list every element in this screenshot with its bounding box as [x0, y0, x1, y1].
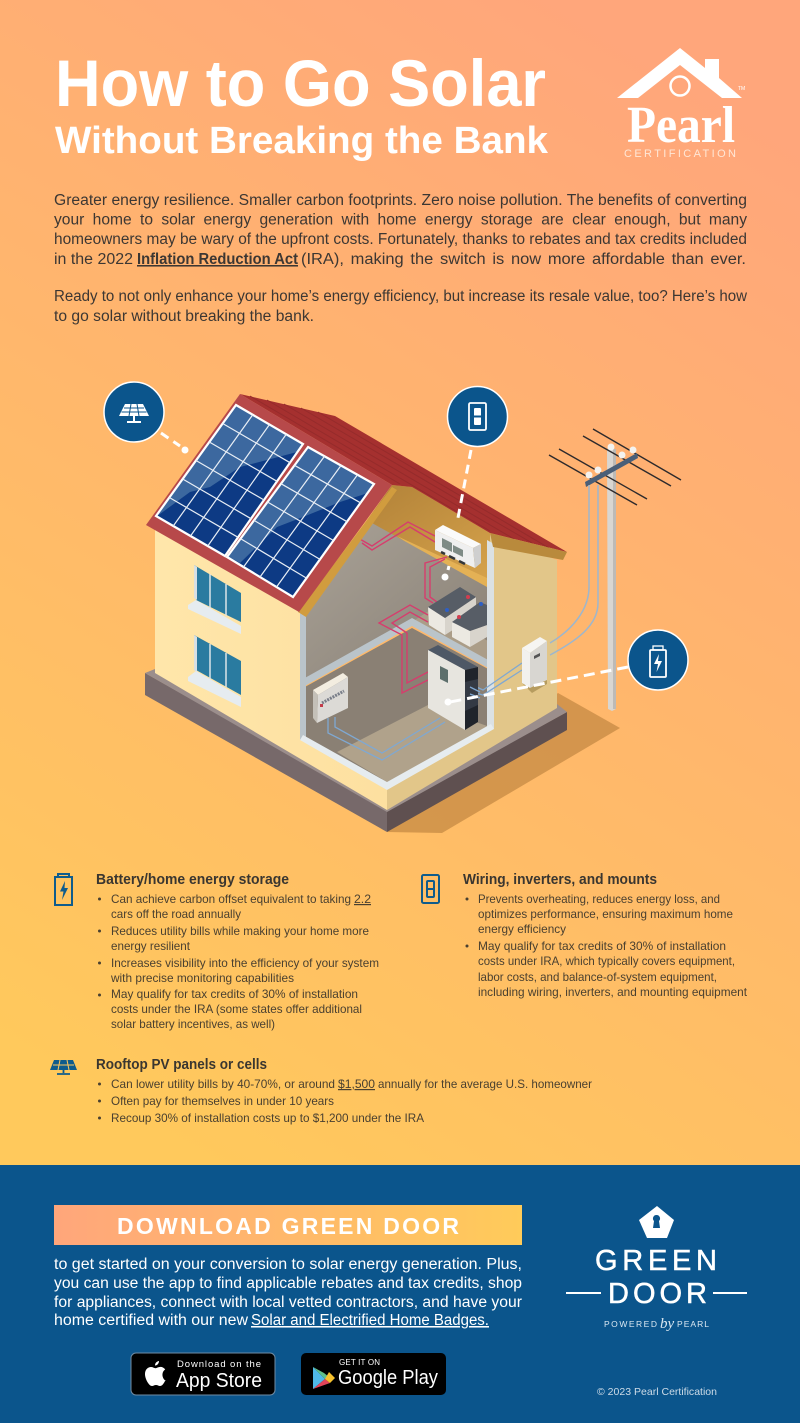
download banner	[54, 1205, 522, 1245]
title: Without Breaking the Bank	[55, 120, 549, 162]
attic beam	[397, 536, 487, 590]
bullets: battery: Increases visibility into the efficiency of your system	[111, 956, 379, 970]
callout line: panels	[161, 433, 188, 454]
batteries	[428, 587, 487, 647]
footer text	[54, 1256, 522, 1329]
footer panel	[0, 1165, 800, 1423]
solar panel left	[156, 405, 303, 556]
title	[55, 46, 549, 162]
logo: Green Door: by	[660, 1316, 674, 1332]
section: rooftop PV	[50, 1057, 592, 1125]
badge: Google Play	[301, 1353, 446, 1395]
bullets: rooftop: Often pay for themselves in under 10 years	[111, 1094, 334, 1108]
intro text: Inflation Reduction Act	[137, 251, 298, 268]
callout line: wiring	[442, 450, 471, 580]
copyright: © 2023 Pearl Certification	[597, 1386, 717, 1398]
badge: App Store	[131, 1353, 275, 1395]
icon: battery	[55, 874, 72, 905]
logo: Green Door: GREEN	[595, 1245, 717, 1277]
bullets: battery: solar battery incentives, as well)	[111, 1017, 275, 1031]
illustration: cutaway solar house	[104, 382, 688, 833]
bullets: wiring: energy efficiency	[478, 922, 566, 936]
icon: panel	[50, 1060, 77, 1074]
wires: magenta DC	[358, 522, 447, 693]
logo: Green Door: DOOR	[608, 1278, 707, 1310]
intro text: your home to solar energy generation with home energy storage are clear enough, but many	[54, 212, 747, 228]
bullets: wiring: including wiring, inverters, and mounting equipment	[478, 985, 748, 999]
callout: wiring icon	[448, 386, 508, 446]
intro text: to go solar without breaking the bank.	[54, 308, 314, 325]
bullets: battery: costs under the IRA (some states offer additional	[111, 1002, 362, 1016]
intro text: homeowners may be wary of the upfront costs. Fortunately, thanks to rebates and tax credits included	[54, 231, 747, 248]
bullets: wiring: costs under IRA, which typically covers equipment,	[478, 954, 735, 968]
footer text: to get started on your conversion to solar energy generation. Plus,	[54, 1256, 522, 1273]
bullets: rooftop: $1,500	[338, 1077, 375, 1091]
window: lower	[188, 635, 241, 707]
bullets: rooftop: Can lower utility bills by 40-70%, or around	[111, 1077, 335, 1091]
logo: Green Door: PEARL	[677, 1319, 709, 1329]
intro text	[54, 192, 748, 325]
heading: rooftop: Rooftop PV panels or cells	[96, 1057, 267, 1073]
intro text: Greater energy resilience. Smaller carbon footprints. Zero noise pollution. The benefits of converting	[54, 192, 747, 209]
badge: Google Play: Google Play	[338, 1367, 438, 1389]
shelf surface	[412, 610, 490, 663]
roof underside edge	[298, 487, 397, 617]
inverter-to-meter wire tips	[470, 687, 480, 698]
bullets: rooftop: Recoup 30% of installation costs up to $1,200 under the IRA	[111, 1111, 424, 1125]
heading: wiring: Wiring, inverters, and mounts	[463, 872, 657, 888]
roof: back slope	[240, 394, 567, 560]
bullets: wiring: Prevents overheating, reduces energy loss, and	[478, 892, 720, 906]
solar panel right	[227, 447, 374, 597]
bullets: wiring	[466, 892, 748, 999]
lower room walls	[303, 628, 490, 784]
logo: Green Door: POWERED	[604, 1319, 657, 1329]
utility pole	[549, 429, 681, 711]
ground shadow	[387, 693, 620, 833]
footer text: you can use the app to find applicable rebates and tax credits, shop	[54, 1275, 522, 1292]
logo: Green Door	[566, 1206, 747, 1332]
logo: Pearl Certification: Pearl	[627, 97, 735, 154]
bullets: battery: 2.2	[354, 892, 371, 906]
floor slab	[303, 618, 490, 687]
badge: App Store: Download on the	[177, 1359, 261, 1370]
bullets: battery: cars off the road annually	[111, 907, 241, 921]
attic	[302, 485, 490, 612]
foundation	[145, 669, 567, 832]
right outer wall	[387, 535, 557, 810]
bullets: battery: energy resilient	[111, 939, 191, 953]
badge: App Store: App Store	[176, 1370, 262, 1392]
footer text: for appliances, connect with local vetted contractors, and have your	[54, 1294, 522, 1311]
intro text: (IRA), making the switch is now more affordable than ever.	[301, 251, 746, 268]
bullets: battery: Reduces utility bills while making your home more	[111, 924, 369, 938]
logo: Pearl Certification	[617, 48, 745, 160]
callout line: battery	[444, 667, 628, 706]
lower room floor	[337, 705, 490, 782]
download banner: DOWNLOAD GREEN DOOR	[117, 1213, 459, 1239]
bullets: battery: May qualify for tax credits of 30% of installation	[111, 987, 358, 1001]
title: How to Go Solar	[55, 46, 546, 120]
footer text: home certified with our new	[54, 1312, 249, 1329]
heading: battery: Battery/home energy storage	[96, 872, 289, 888]
electric meter	[522, 637, 547, 693]
bullets: rooftop	[98, 1077, 592, 1125]
bullets: wiring: labor costs, and balance-of-system equipment,	[478, 970, 717, 984]
bullets: wiring: optimizes performance, ensuring maximum home	[478, 907, 733, 921]
badge: Google Play: GET IT ON	[339, 1358, 380, 1367]
upper room back wall	[302, 523, 490, 682]
bullets: battery: with precise monitoring capabilities	[110, 971, 294, 985]
logo: Pearl Certification: TM	[738, 86, 745, 92]
bullets: wiring: May qualify for tax credits of 30% of installation	[478, 939, 726, 953]
bullets: rooftop: annually for the average U.S. homeowner	[378, 1077, 592, 1091]
breaker panel	[313, 673, 348, 723]
inverter	[428, 645, 478, 730]
window: upper	[188, 565, 241, 634]
intro text: Ready to not only enhance your home’s energy efficiency, but increase its resale value, too? Here’s how	[54, 288, 748, 305]
roof: front slope	[146, 394, 392, 612]
wires: blue AC	[328, 663, 522, 760]
section: battery storage	[55, 872, 379, 1031]
logo: Pearl Certification: CERTIFICATION	[624, 148, 736, 160]
charge controller	[435, 525, 481, 568]
service wires	[550, 485, 598, 655]
intro text: in the 2022	[54, 251, 133, 268]
callout: battery icon	[628, 630, 688, 690]
bullets: battery	[98, 892, 379, 1031]
bullets: battery: Can achieve carbon offset equivalent to taking	[111, 892, 351, 906]
callout: solar panel icon	[104, 382, 164, 442]
left outer wall	[155, 528, 387, 810]
icon: switch	[422, 875, 439, 903]
section: wiring	[422, 872, 748, 999]
cut edges	[300, 540, 494, 790]
footer text: Solar and Electrified Home Badges.	[251, 1312, 489, 1329]
